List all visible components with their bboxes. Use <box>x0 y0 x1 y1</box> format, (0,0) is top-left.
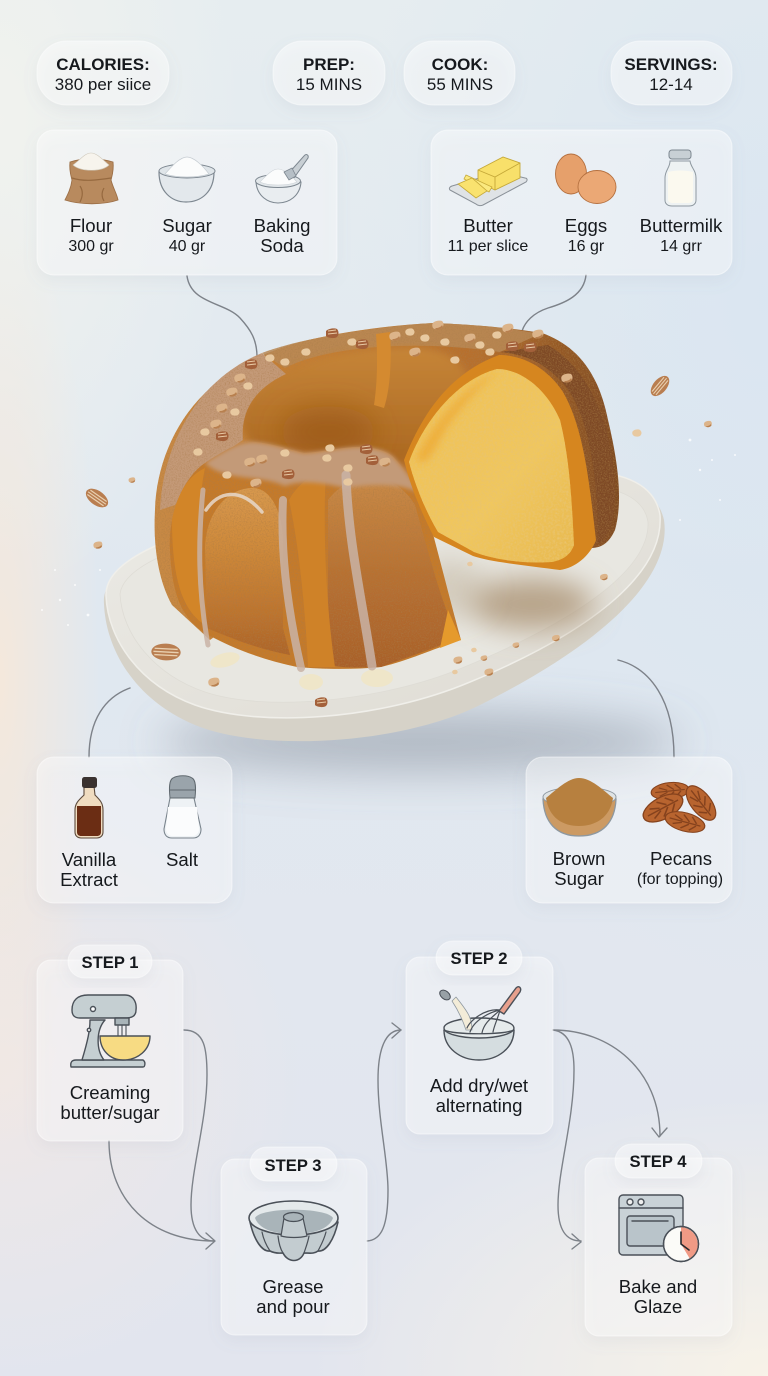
step 1 badge: STEP 1 <box>82 953 138 972</box>
cut slice <box>404 355 596 570</box>
stat pill: servings: 12-14 <box>649 75 693 94</box>
icon: vanilla bottle <box>75 777 103 838</box>
icon: baking soda bowl and spoon <box>256 155 308 203</box>
icon: bundt pan <box>249 1201 338 1260</box>
glazed cake top <box>205 442 421 494</box>
stat pill: calories: CALORIES: <box>56 55 150 74</box>
back of cake ring <box>155 323 619 640</box>
flying pecans and crumbs <box>83 373 712 707</box>
step 4 badge <box>615 1144 702 1178</box>
step 2 badge: STEP 2 <box>451 949 507 968</box>
step 4 card: Bake and <box>619 1276 697 1297</box>
icon: oven with timer <box>619 1195 698 1262</box>
step 3 card: Grease <box>263 1276 323 1297</box>
step 4 card <box>585 1144 732 1336</box>
panel: flour, sugar, baking soda: Sugar <box>162 215 212 236</box>
step 2 card: alternating <box>436 1095 522 1116</box>
step 3 card: and pour <box>256 1296 330 1317</box>
ridge on back wall <box>374 332 391 408</box>
panel one <box>205 488 290 655</box>
inner hole wall <box>241 348 470 465</box>
icon: stand mixer <box>71 995 150 1067</box>
panel: brown sugar, pecans: (for topping) <box>637 871 723 888</box>
step 2 card <box>406 941 553 1134</box>
icon: salt shaker <box>164 776 201 838</box>
icon: mixing bowl with whisk and spoon <box>438 987 521 1060</box>
icon: pecans <box>639 781 721 836</box>
panel: vanilla extract, salt: Extract <box>60 869 119 890</box>
panel: butter, eggs, buttermilk: 16 gr <box>568 238 605 255</box>
glaze drips <box>200 475 372 668</box>
panel: butter, eggs, buttermilk: Buttermilk <box>640 215 723 236</box>
plate <box>104 470 665 741</box>
stat pill: calories: 380 per siice <box>55 75 151 94</box>
step 2 card: Add dry/wet <box>430 1075 529 1096</box>
step 4 card: Glaze <box>634 1296 682 1317</box>
panel: butter, eggs, buttermilk: 11 per slice <box>448 238 528 255</box>
front cake chunk <box>170 442 461 669</box>
step 3 badge: STEP 3 <box>265 1156 321 1175</box>
glaze pools <box>209 650 393 690</box>
stat pill: cook: COOK: <box>432 55 488 74</box>
panel: brown sugar, pecans <box>526 757 732 903</box>
icon: buttermilk bottle <box>665 150 696 206</box>
step 1 badge <box>68 945 152 978</box>
glazed left of ring <box>160 353 286 510</box>
icon: sugar bowl <box>159 157 215 202</box>
panel: flour, sugar, baking soda: 300 gr <box>68 238 114 255</box>
panel: flour, sugar, baking soda: 40 gr <box>169 238 206 255</box>
panel: butter, eggs, buttermilk: 14 grr <box>660 238 703 255</box>
flour dust <box>41 439 736 626</box>
step 1 card: butter/sugar <box>60 1102 160 1123</box>
orange crust ridges <box>172 468 205 625</box>
stat pill: cook: 55 MINS <box>427 75 493 94</box>
plate shadow <box>160 712 680 772</box>
top glaze band <box>262 323 540 368</box>
panel: brown sugar, pecans: Sugar <box>554 868 604 889</box>
process arrows <box>109 1023 667 1249</box>
panel two <box>328 478 458 668</box>
panel: vanilla extract, salt: Salt <box>166 849 199 870</box>
panel: butter, eggs, buttermilk: Butter <box>463 215 513 236</box>
panel: flour, sugar, baking soda: Flour <box>70 215 112 236</box>
icon: butter on a dish <box>449 157 527 206</box>
stat pill: prep: 15 MINS <box>296 75 362 94</box>
step 4 badge: STEP 4 <box>630 1152 687 1171</box>
panel: vanilla extract, salt: Vanilla <box>62 849 117 870</box>
step 2 badge <box>436 941 522 975</box>
stat pill: prep <box>273 41 385 105</box>
step 1 card <box>37 945 183 1141</box>
panel: brown sugar, pecans: Pecans <box>650 848 712 869</box>
step 1 card: Creaming <box>70 1082 150 1103</box>
step 3 card <box>221 1147 367 1335</box>
shadow on plate <box>470 578 594 630</box>
step 3 badge <box>250 1147 337 1181</box>
stat pill: servings <box>611 41 732 105</box>
stat pill: cook <box>404 41 515 105</box>
panel: butter, eggs, buttermilk: Eggs <box>565 215 607 236</box>
icon: flour sack <box>65 153 118 204</box>
panel: flour, sugar, baking soda: Baking <box>254 215 310 236</box>
panel: flour, sugar, baking soda <box>37 130 337 275</box>
stat pill: servings: SERVINGS: <box>624 55 718 74</box>
panel: vanilla extract, salt <box>37 757 232 903</box>
panel: butter, eggs, buttermilk <box>431 130 732 275</box>
dark back edge <box>500 345 615 544</box>
panel: flour, sugar, baking soda: Soda <box>260 235 304 256</box>
stat pill: prep: PREP: <box>303 55 355 74</box>
hero: bundt cake on plate <box>41 321 736 772</box>
icon: two eggs <box>556 154 616 204</box>
panel: brown sugar, pecans: Brown <box>553 848 605 869</box>
connector lines: panels to cake <box>89 275 674 757</box>
pecan topping pieces <box>193 321 572 488</box>
stat pill: calories <box>37 41 169 105</box>
icon: brown sugar bowl <box>543 778 616 836</box>
